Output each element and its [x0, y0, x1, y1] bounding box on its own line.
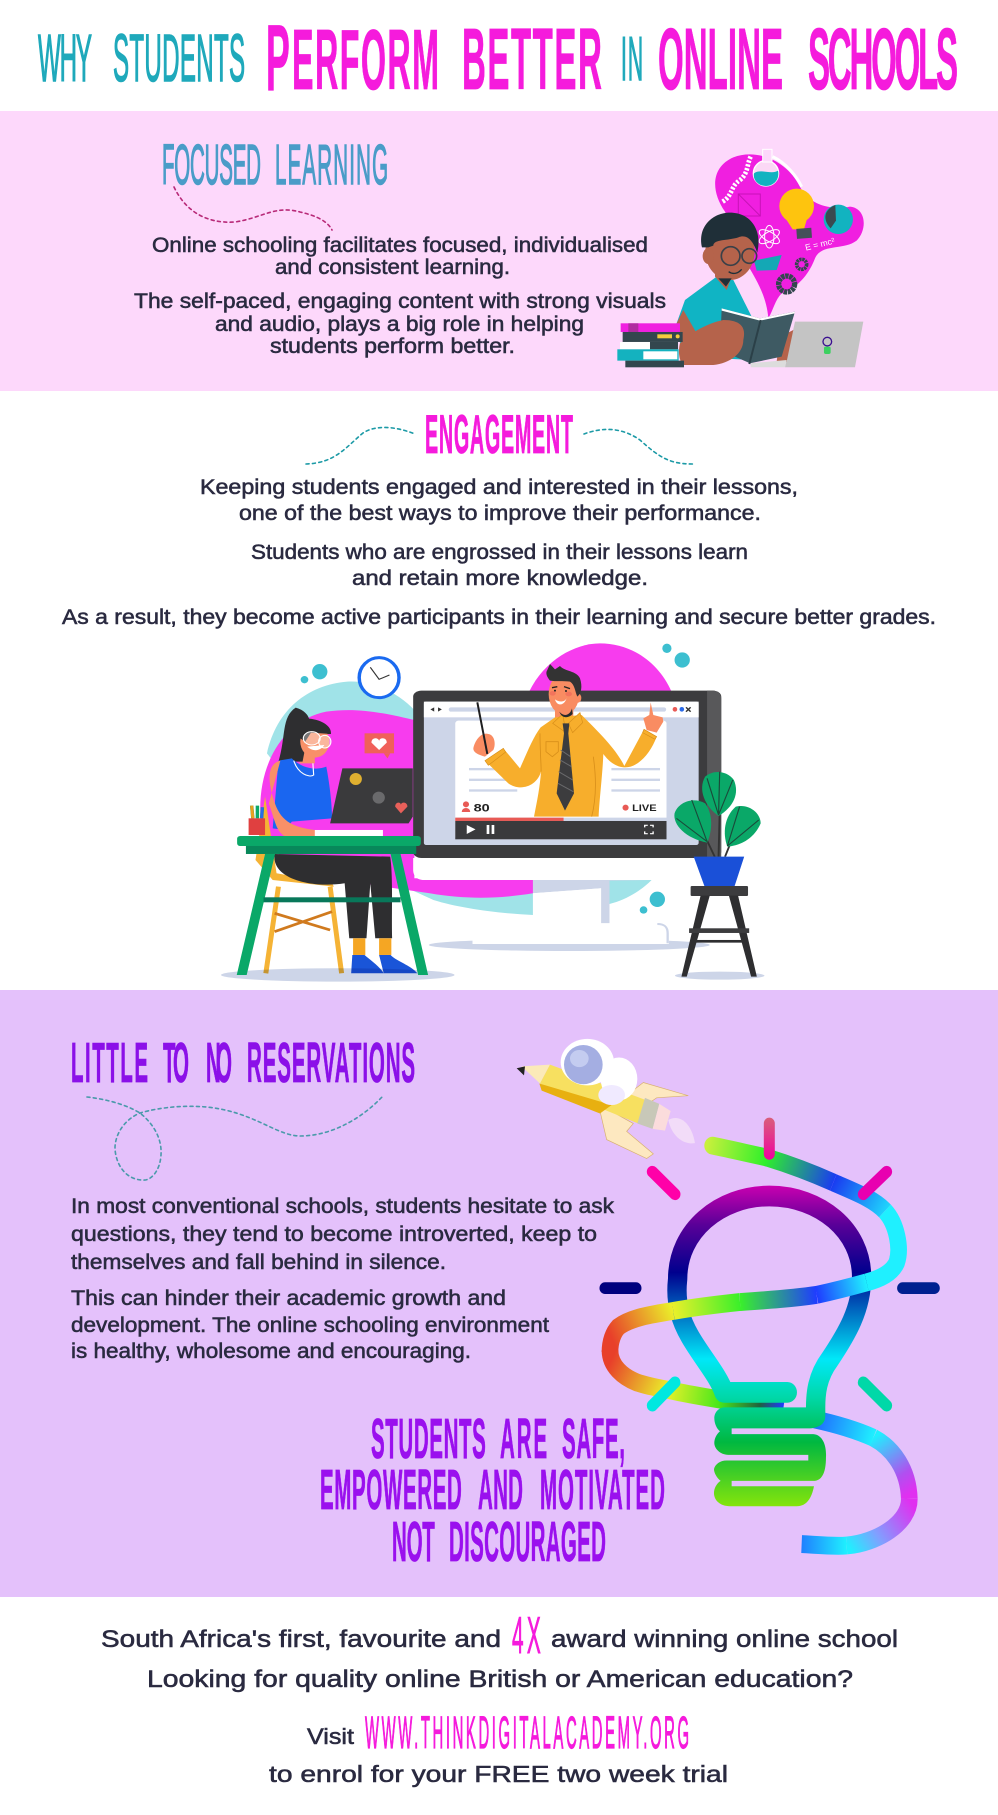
plant: [674, 772, 761, 886]
icon: rays: [605, 1124, 934, 1406]
heading: focused learning: FOCUSED: [162, 133, 261, 197]
callout: students are safe: AND: [478, 1458, 523, 1522]
title: [38, 7, 958, 111]
callout: students are safe: ARE: [500, 1407, 547, 1471]
title: WHY: [38, 20, 92, 96]
text: reservations body: In most conventional schools, students hesitate to ask: [71, 1195, 615, 1218]
footer: 4X: [512, 1607, 541, 1665]
title: ONLINE: [658, 10, 783, 108]
text: reservations body: is healthy, wholesome and encouraging.: [71, 1340, 471, 1363]
teacher: [473, 664, 663, 817]
callout: students are safe: [320, 1407, 665, 1574]
illustration: rainbow light bulb and pencil rocket: [517, 1039, 934, 1546]
heading: focused learning: [162, 133, 388, 197]
title: SCHOOLS: [808, 10, 958, 108]
panel: engagement: [0, 391, 998, 990]
text: focused learning body: and consistent learning.: [275, 256, 510, 279]
text: reservations body: themselves and fall behind in silence.: [71, 1251, 446, 1274]
text: engagement body: As a result, they become active participants in their learning and secure better grades.: [62, 606, 936, 629]
footer: Looking for quality online British or American education?: [147, 1666, 853, 1693]
icon: light bulb: [677, 1196, 862, 1506]
callout: students are safe: SAFE,: [562, 1407, 625, 1471]
text: engagement body: Students who are engrossed in their lessons learn: [251, 541, 748, 564]
text: reservations body: questions, they tend to become introverted, keep to: [71, 1223, 597, 1246]
title: BETTER: [462, 10, 602, 108]
panel: focused learning: [0, 111, 998, 391]
footer: WWW.THINKDIGITALACADEMY.ORG: [365, 1709, 689, 1759]
footer: South Africa's first, favourite and: [101, 1626, 501, 1653]
illustration: student with book: [617, 149, 864, 367]
text: reservations body: This can hinder their academic growth and: [71, 1287, 506, 1310]
heading: focused learning: LEARNING: [275, 133, 388, 197]
monitor: [413, 691, 721, 858]
callout: students are safe: MOTIVATED: [540, 1458, 665, 1522]
text: engagement body: and retain more knowledge.: [352, 567, 648, 590]
text: reservations body: development. The online schooling environment: [71, 1314, 549, 1337]
desk: [237, 836, 428, 975]
text: focused learning body: Online schooling facilitates focused, individualised: [152, 234, 648, 257]
panel: little to no reservations: [0, 990, 998, 1597]
stool: [675, 886, 764, 980]
callout: students are safe: EMPOWERED: [320, 1458, 462, 1522]
callout: students are safe: STUDENTS: [371, 1407, 486, 1471]
illustration: student with book: E = mc²: [804, 236, 836, 253]
woman: [255, 708, 417, 973]
icon: pencil rocket with astronaut: [517, 1039, 695, 1159]
text: focused learning body: The self-paced, engaging content with strong visuals: [134, 290, 666, 313]
monitor: LIVE: [632, 804, 657, 814]
illustration: online lesson: [221, 643, 764, 982]
text: reservations body: [71, 1195, 615, 1363]
text: engagement body: [62, 476, 936, 629]
heading: little to no reservations: [71, 1031, 415, 1095]
monitor: 80: [474, 801, 490, 814]
pencil cup: [249, 806, 265, 835]
text: focused learning body: students perform better.: [270, 335, 515, 358]
footer: Visit: [307, 1724, 354, 1749]
callout: students are safe: NOT: [392, 1510, 435, 1574]
footer: award winning online school: [551, 1626, 898, 1653]
heading: little to no reservations: TO: [163, 1031, 189, 1095]
heading: engagement: ENGAGEMENT: [425, 404, 573, 465]
heading: little to no reservations: LITTLE: [71, 1031, 148, 1095]
text: focused learning body: and audio, plays a big role in helping: [215, 313, 584, 336]
footer: to enrol for your FREE two week trial: [269, 1761, 728, 1787]
footer: [101, 1607, 898, 1787]
title: ERFORM: [292, 12, 439, 108]
callout: students are safe: DISCOURAGED: [449, 1510, 606, 1574]
text: engagement body: Keeping students engaged and interested in their lessons,: [200, 476, 798, 499]
heading: little to no reservations: RESERVATIONS: [247, 1031, 415, 1095]
heading: little to no reservations: NO: [206, 1031, 232, 1095]
text: focused learning body: [134, 234, 666, 358]
text: engagement body: one of the best ways to improve their performance.: [239, 502, 761, 525]
title: STUDENTS: [113, 20, 245, 96]
title: P: [266, 7, 290, 111]
title: IN: [621, 24, 643, 93]
icon: clock: [359, 658, 399, 698]
